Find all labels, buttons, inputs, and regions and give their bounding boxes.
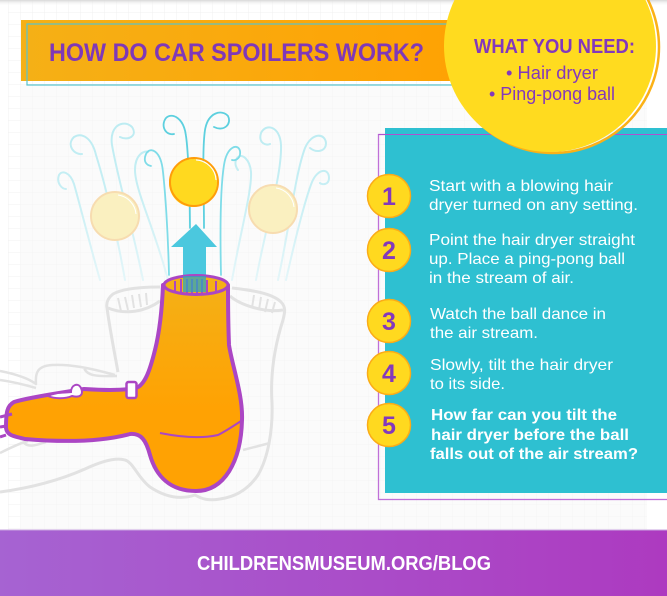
step 3 text: Watch the ball dance in — [430, 306, 606, 323]
step 5 — [368, 404, 638, 463]
step 4 text: to its side. — [430, 376, 505, 393]
air wisps, faded — [58, 124, 329, 280]
step 3 — [368, 300, 606, 342]
step 2 — [368, 228, 636, 287]
step 2 text: in the stream of air. — [429, 270, 574, 287]
faded ping-pong ball left — [91, 192, 139, 240]
step 5: 5 — [382, 412, 396, 440]
air arrow — [171, 224, 217, 295]
ping-pong ball — [169, 158, 218, 207]
item: hair dryer: • Hair dryer — [506, 63, 598, 83]
footer link: CHILDRENSMUSEUM.ORG/BLOG — [197, 553, 491, 575]
hair dryer — [0, 276, 242, 491]
step 1 text: Start with a blowing hair — [429, 178, 614, 195]
slider — [48, 385, 82, 398]
step 2 text: up. Place a ping-pong ball — [429, 251, 625, 268]
footer bar — [0, 530, 667, 596]
air wisps, bright — [145, 113, 240, 275]
step 1: 1 — [382, 183, 396, 211]
step 3: 3 — [382, 308, 396, 336]
dryer seam — [160, 421, 241, 437]
cord stub — [0, 414, 12, 437]
step 1 — [368, 174, 638, 218]
nozzle opening — [164, 276, 228, 294]
step 5 text: hair dryer before the ball — [431, 427, 629, 444]
instructions panel — [378, 128, 667, 500]
step 4: 4 — [382, 360, 396, 388]
step 4 text: Slowly, tilt the hair dryer — [430, 357, 614, 374]
step 3 text: the air stream. — [430, 325, 538, 342]
title banner — [21, 20, 467, 85]
step 5 text: falls out of the air stream? — [430, 446, 638, 463]
step 5 text: How far can you tilt the — [431, 407, 617, 424]
faded ping-pong ball right — [249, 185, 297, 233]
step 1 text: dryer turned on any setting. — [429, 197, 638, 214]
switch — [126, 382, 136, 398]
ghost hair dryer — [0, 287, 285, 500]
item: ping-pong ball: • Ping-pong ball — [489, 84, 615, 104]
what you need heading: WHAT YOU NEED: — [474, 36, 635, 58]
dryer body — [6, 285, 242, 491]
what you need circle — [444, 0, 659, 153]
step 4 — [368, 352, 614, 394]
step 2: 2 — [382, 237, 396, 265]
title: HOW DO CAR SPOILERS WORK? — [49, 39, 424, 67]
step 2 text: Point the hair dryer straight — [429, 232, 636, 249]
